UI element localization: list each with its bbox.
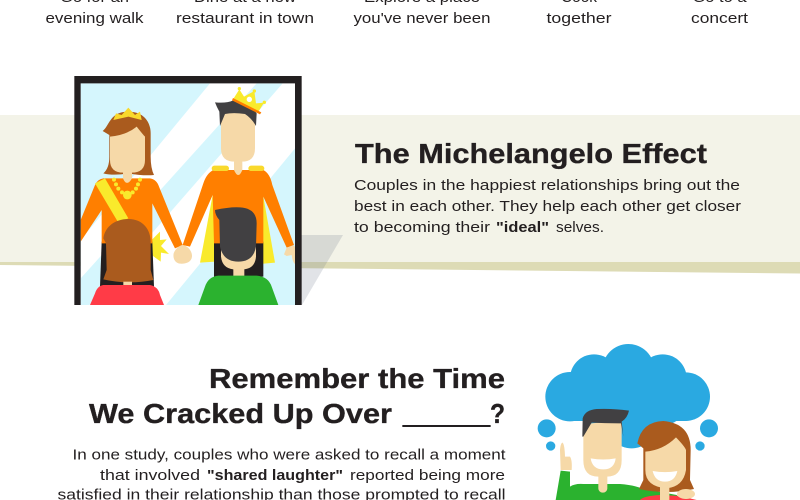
thought cloud (538, 344, 718, 451)
panel: cream band (0, 115, 800, 274)
body text: "shared laughter" (207, 468, 343, 484)
idea: cook together: together (546, 11, 612, 27)
illustration: mirror with couple (74, 76, 302, 305)
idea: concert: concert (691, 11, 748, 27)
back of woman (90, 219, 164, 305)
section: shared laughter text (58, 363, 506, 500)
woman (637, 421, 697, 500)
heading: ? (490, 398, 505, 429)
idea: evening walk: evening walk (46, 11, 144, 27)
section: Michelangelo Effect text (354, 138, 741, 236)
body text: that involved (100, 468, 200, 484)
illustration: laughing couple with thought cloud (538, 344, 718, 500)
body text: Couples in the happiest relationships bring out the (354, 178, 740, 194)
mirror glass (81, 83, 295, 305)
reflection: queen (81, 108, 192, 287)
reflection: king (183, 87, 295, 277)
heading: Remember the Time (209, 363, 505, 394)
body text: selves. (556, 220, 604, 236)
body text: In one study, couples who were asked to recall a moment (72, 448, 505, 464)
body text: "ideal" (496, 220, 549, 236)
mirror shadow (301, 235, 343, 305)
man (556, 409, 680, 500)
top row of date ideas (46, 0, 748, 27)
body text: to becoming their (354, 220, 490, 236)
idea: new restaurant: restaurant in town (176, 11, 314, 27)
body text: best in each other. They help each other get closer (354, 199, 741, 215)
body text: reported being more (350, 468, 505, 484)
mirror frame (74, 76, 302, 305)
idea: new place: you've never been (354, 11, 490, 27)
heading: ______ (402, 398, 490, 429)
heading: We Cracked Up Over (89, 398, 392, 429)
back of man (198, 207, 278, 305)
heading: The Michelangelo Effect (355, 138, 707, 169)
